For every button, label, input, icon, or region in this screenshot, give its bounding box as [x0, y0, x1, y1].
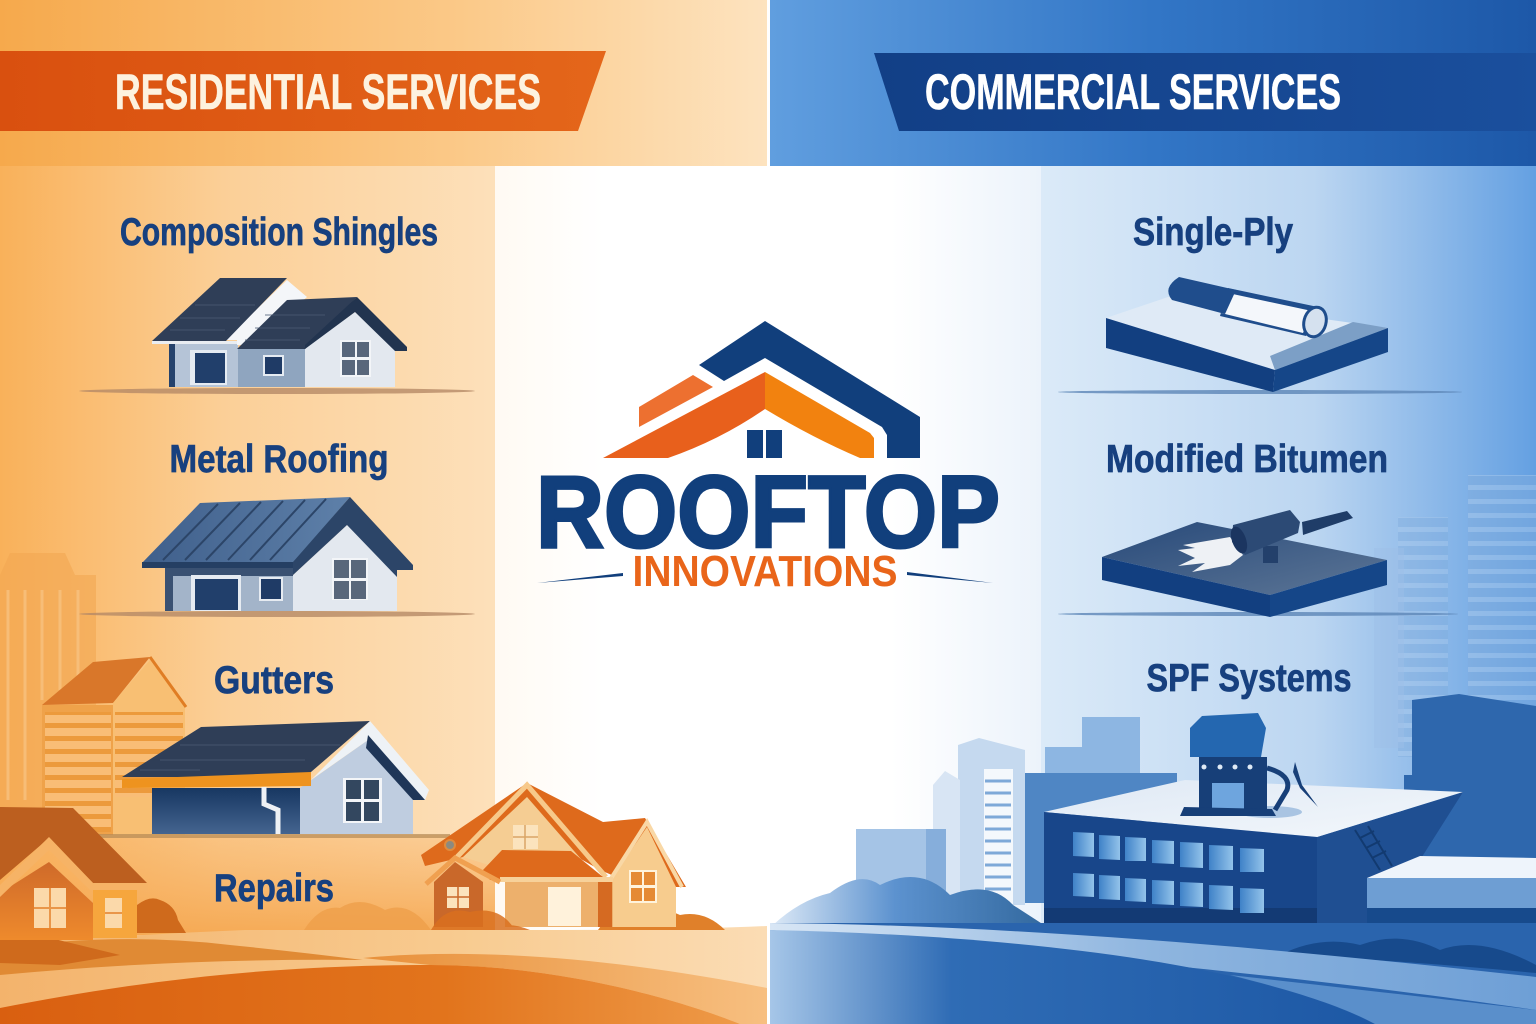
icon: modified bitumen torch	[1058, 510, 1458, 617]
heading: spf systems: SPF Systems	[1146, 657, 1352, 700]
heading: single-ply: Single-Ply	[1133, 211, 1293, 254]
house: center orange	[421, 783, 686, 930]
heading: gutters: Gutters	[214, 659, 334, 702]
banner: commercial services: COMMERCIAL SERVICES	[925, 64, 1341, 120]
left skyline backdrop	[0, 553, 186, 835]
icon: metal roof house	[79, 497, 475, 617]
right skyline backdrop	[856, 475, 1536, 905]
house: lower left	[0, 807, 148, 940]
heading: modified bitumen: Modified Bitumen	[1106, 438, 1388, 481]
banner: residential services	[0, 51, 606, 131]
icon: composition shingle house	[79, 278, 475, 394]
banner: commercial services	[874, 53, 1536, 131]
banner: residential services: RESIDENTIAL SERVICES	[115, 64, 541, 120]
heading: metal roofing: Metal Roofing	[170, 438, 388, 481]
icon: commercial building with spf rig	[1044, 713, 1536, 928]
ground: commercial	[770, 877, 1536, 1024]
heading: repairs: Repairs	[214, 867, 334, 910]
ground: residential	[0, 898, 767, 1024]
heading: composition shingles: Composition Shingles	[120, 211, 438, 254]
logo: rooftop innovations	[536, 321, 1000, 596]
icon: gutter house	[80, 721, 450, 838]
logo: rooftop innovations: ROOFTOP	[536, 455, 1000, 569]
icon: single-ply roll	[1058, 277, 1462, 394]
logo: rooftop innovations: INNOVATIONS	[632, 547, 898, 596]
